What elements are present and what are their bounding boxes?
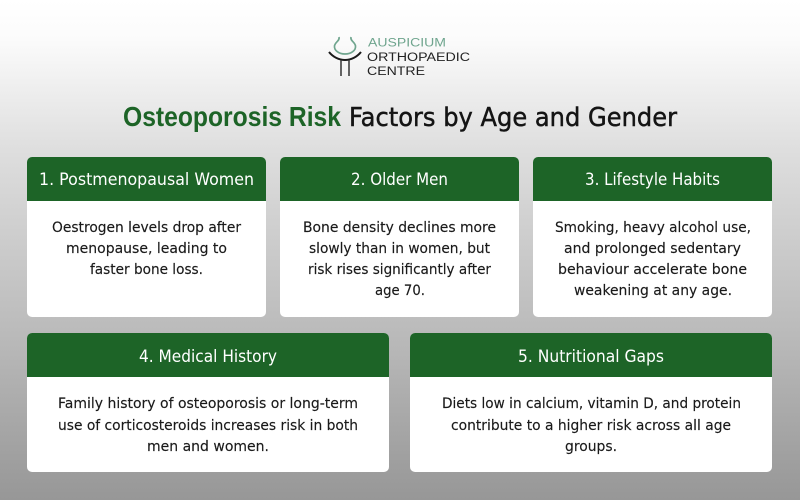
- heading 1: 1. Postmenopausal Women: [39, 170, 254, 189]
- title: [123, 101, 677, 133]
- panel: 4. Medical History: [27, 333, 389, 472]
- panel header 5: [410, 333, 772, 377]
- title: Factors by Age and Gender: [349, 103, 677, 133]
- body text 1: faster bone loss.: [90, 261, 203, 278]
- panel header 4: [27, 333, 389, 377]
- body text 5: [442, 395, 741, 455]
- body text 4: use of corticosteroids increases risk in both: [58, 417, 358, 434]
- heading 3: 3. Lifestyle Habits: [585, 170, 720, 189]
- body text 1: menopause, leading to: [66, 240, 227, 257]
- heading 5: 5. Nutritional Gaps: [518, 347, 664, 366]
- body text 2: age 70.: [375, 282, 425, 299]
- body text 5: groups.: [565, 438, 617, 455]
- logo text: [367, 38, 470, 78]
- body text 2: risk rises significantly after: [308, 261, 491, 278]
- logo: Auspicium Orthopaedic Centre: [329, 37, 470, 78]
- body text 2: [303, 219, 496, 299]
- panel: 3. Lifestyle Habits: [533, 157, 772, 317]
- body text 2: slowly than in women, but: [309, 240, 490, 257]
- icon: bone joint: [329, 37, 361, 76]
- panel: 5. Nutritional Gaps: [410, 333, 772, 472]
- body text 2: Bone density declines more: [303, 219, 496, 236]
- title: Osteoporosis Risk: [123, 101, 341, 132]
- logo text: ORTHOPAEDIC: [367, 52, 470, 64]
- panel: 1. Postmenopausal Women: [27, 157, 266, 317]
- body text 1: [52, 219, 241, 278]
- logo text: CENTRE: [367, 66, 425, 78]
- body text 3: behaviour accelerate bone: [558, 261, 747, 278]
- body text 4: men and women.: [147, 438, 269, 455]
- heading 4: 4. Medical History: [139, 347, 277, 366]
- body text 5: Diets low in calcium, vitamin D, and protein: [442, 395, 741, 412]
- body text 4: Family history of osteoporosis or long-term: [58, 395, 358, 412]
- panel: 2. Older Men: [280, 157, 519, 317]
- heading 2: 2. Older Men: [351, 170, 448, 189]
- body text 3: and prolonged sedentary: [564, 240, 741, 257]
- body text 3: [555, 219, 751, 299]
- body text 1: Oestrogen levels drop after: [52, 219, 241, 236]
- body text 5: contribute to a higher risk across all age: [451, 417, 731, 434]
- body text 3: weakening at any age.: [574, 282, 732, 299]
- panel header 3: [533, 157, 772, 201]
- panel header 2: [280, 157, 519, 201]
- body text 3: Smoking, heavy alcohol use,: [555, 219, 751, 236]
- panel header 1: [27, 157, 266, 201]
- logo text: AUSPICIUM: [368, 38, 446, 50]
- body text 4: [58, 395, 358, 455]
